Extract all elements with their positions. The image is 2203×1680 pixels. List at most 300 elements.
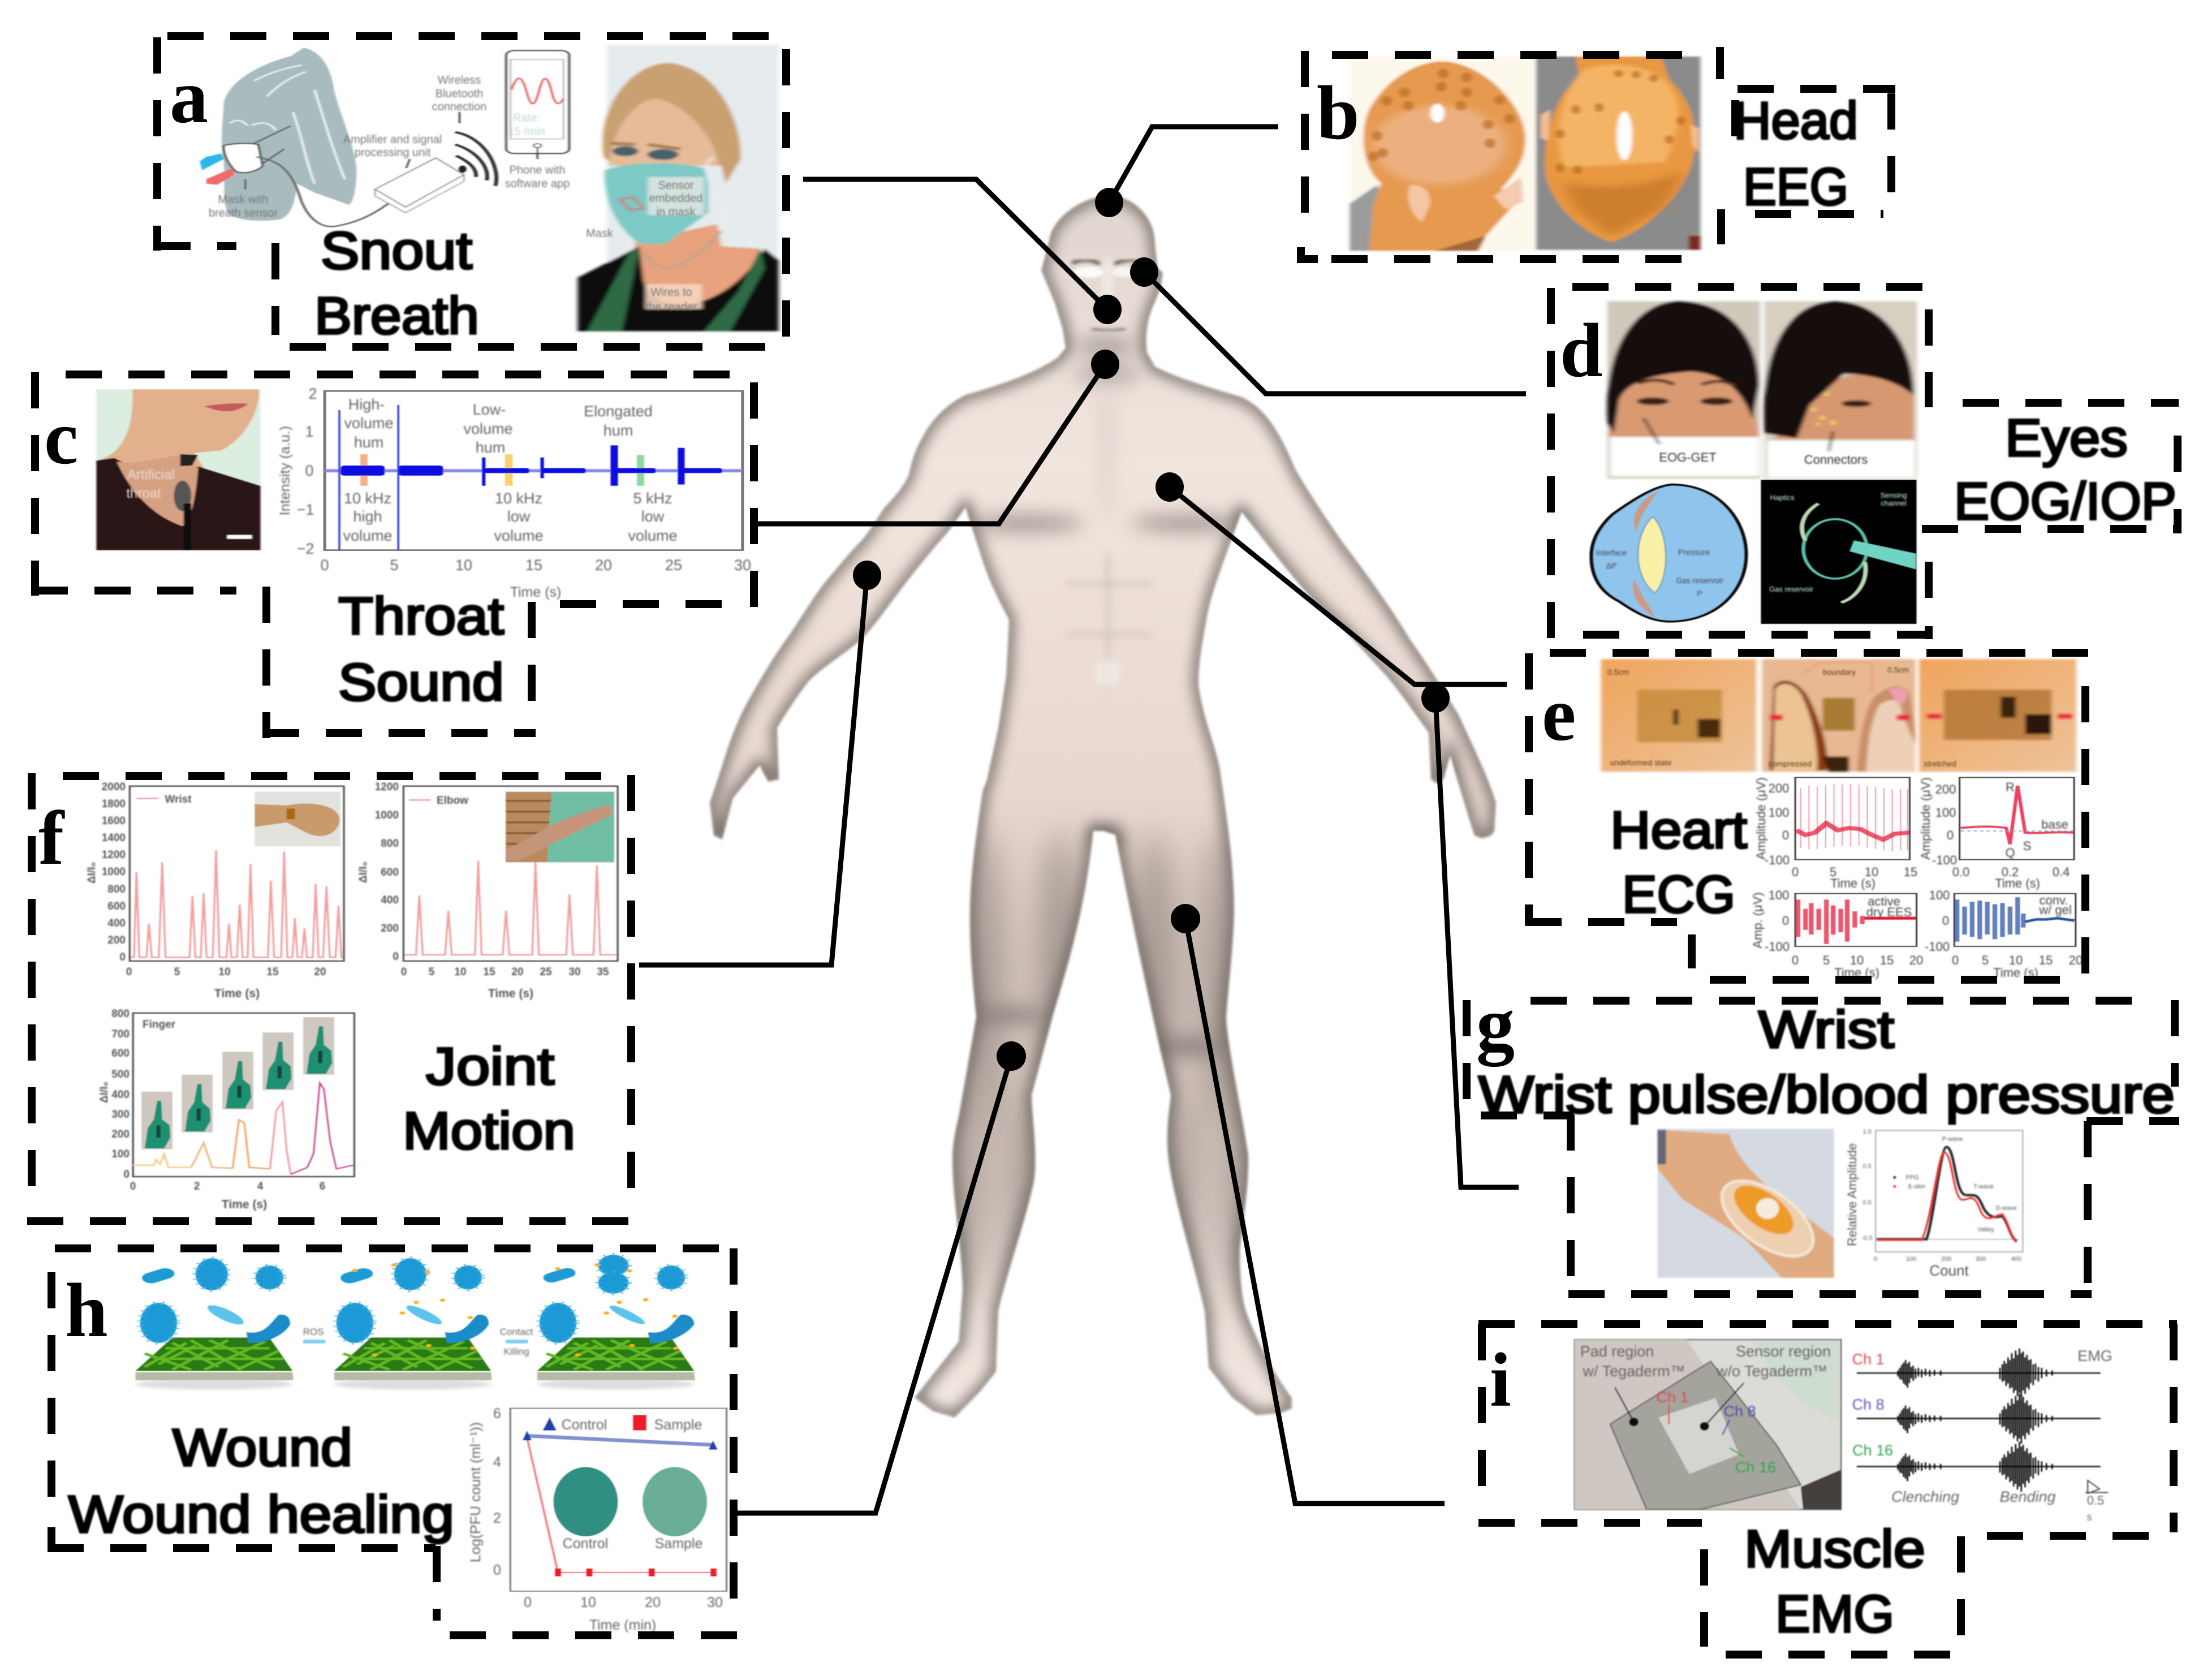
panel e small annotations: 5 xyxy=(1982,953,1989,967)
panel e small annotations: 0 xyxy=(1942,914,1949,928)
panel e small annotations: boundary xyxy=(1823,667,1856,677)
pulse chart labels: Count xyxy=(1929,1262,1969,1279)
panel f axis labels: 15 xyxy=(483,966,495,978)
panel e small annotations: 0 xyxy=(1782,914,1789,928)
panel d small annotations: Sensing xyxy=(1881,491,1907,499)
panel f axis labels: 400 xyxy=(111,1089,130,1101)
panel h small labels: 10 xyxy=(580,1595,596,1610)
panel c chart annotations: volume xyxy=(628,527,678,544)
panel c chart annotations: Time (s) xyxy=(510,584,561,600)
panel h small labels: Sample xyxy=(655,1536,702,1552)
panel e small annotations: 100 xyxy=(1769,888,1789,902)
panel c neck photo xyxy=(96,389,260,550)
panel f axis labels: 0 xyxy=(119,951,126,963)
panel i small labels: Pad region xyxy=(1580,1343,1654,1360)
panel a small annotations: Rate: xyxy=(513,112,540,124)
panel f axis labels: 4 xyxy=(257,1181,264,1192)
panel c chart annotations: 0 xyxy=(320,557,329,574)
pulse chart labels: 0.5 xyxy=(1863,1163,1872,1170)
panel c chart annotations: 1 xyxy=(305,423,314,440)
panel d small annotations: ΔP xyxy=(1606,561,1616,570)
panel c photo label xyxy=(126,467,175,501)
panel d small annotations: Gas reservoir xyxy=(1676,576,1723,585)
muscle caption box: EMG xyxy=(1775,1584,1894,1643)
panel f axis labels: 6 xyxy=(320,1181,325,1192)
panel c chart annotations: High- xyxy=(348,396,385,413)
panel e small annotations: stretched xyxy=(1924,759,1956,768)
panel f axis labels: 5 xyxy=(429,966,435,978)
panel a heading: Snout xyxy=(321,221,472,280)
panel e small annotations: Amp. (μV) xyxy=(1751,892,1765,949)
pulse chart labels: 100 xyxy=(1906,1256,1916,1263)
panel e small annotations: Q xyxy=(2005,846,2015,860)
panel i small labels: w/o Tegaderm™ xyxy=(1716,1363,1827,1380)
panel e small annotations: 15 xyxy=(1880,953,1894,967)
panel a small annotations: 15 /min xyxy=(508,126,545,138)
panel e small annotations: 0 xyxy=(1792,865,1799,879)
panel c chart annotations: volume xyxy=(344,415,394,432)
throat sound caption box xyxy=(263,587,536,738)
panel a small annotations: Sensor xyxy=(658,179,694,192)
panel f: joint motion xyxy=(27,773,635,1221)
panel e small annotations: 0.2 xyxy=(2002,865,2019,879)
panel f axis labels: 700 xyxy=(111,1028,130,1040)
panel e small annotations: -100 xyxy=(1932,853,1957,867)
panel f axis labels: Time (s) xyxy=(214,987,260,1000)
panel f axis labels: 800 xyxy=(107,884,126,895)
panel f axis labels: 1200 xyxy=(375,781,399,793)
panel e small annotations: conv. xyxy=(2040,893,2068,907)
panel e heading xyxy=(1610,800,1747,924)
panel g heading: Wrist xyxy=(1758,1000,1894,1059)
panel i dashed border xyxy=(1478,1324,2177,1536)
panel e ECG charts xyxy=(1795,778,2076,946)
pulse chart labels: Valley xyxy=(1977,1226,1994,1233)
panel f axis labels: 1200 xyxy=(102,849,126,861)
panel h small labels xyxy=(303,1326,723,1633)
panel d small annotations: channel xyxy=(1881,499,1907,507)
panel f axis labels: Elbow xyxy=(437,795,468,807)
panel c chart annotations: low xyxy=(641,508,665,525)
panel c chart annotations: Intensity (a.u.) xyxy=(277,426,293,515)
panel h heading: Wound healing xyxy=(68,1485,454,1544)
panel d small annotations: Haptics xyxy=(1770,493,1795,502)
panel f axis labels: 600 xyxy=(381,867,399,878)
panel f axis labels: 0 xyxy=(126,966,132,978)
panel c chart annotations: 10 kHz xyxy=(344,490,391,507)
panel c chart annotations: volume xyxy=(343,527,393,544)
wrist strain chart xyxy=(130,786,344,961)
panel a small annotations: the reader xyxy=(645,301,697,313)
panel f axis labels: 15 xyxy=(266,966,279,978)
panel g heading xyxy=(1478,1000,2175,1124)
panel e small annotations: 5 xyxy=(1823,953,1830,967)
panel e small annotations: -100 xyxy=(1765,853,1790,867)
panel i small labels: w/ Tegaderm™ xyxy=(1582,1363,1685,1380)
panel e small annotations: 100 xyxy=(1935,805,1956,820)
panel a small annotations: software app xyxy=(505,178,570,190)
panel e heading: ECG xyxy=(1622,865,1735,924)
panel d small annotations: Connectors xyxy=(1804,453,1868,467)
panel c chart annotations: 10 kHz xyxy=(495,490,542,507)
panel h small labels: 6 xyxy=(493,1406,501,1421)
panel d small annotations xyxy=(1596,450,1907,598)
panel e small annotations: 0 xyxy=(1792,953,1799,967)
panel d small annotations: EOG-GET xyxy=(1659,450,1717,464)
panel c chart annotations: 5 kHz xyxy=(633,490,672,507)
panel f axis labels: Time (s) xyxy=(222,1198,267,1211)
panel d face photos xyxy=(1607,301,1917,479)
pulse chart labels: 1.0 xyxy=(1863,1128,1872,1135)
facial features xyxy=(1072,256,1145,331)
panel f axis labels: 100 xyxy=(111,1148,130,1160)
panel e small annotations: 0.5cm xyxy=(1607,667,1629,677)
panel e small annotations: Time (s) xyxy=(1993,966,2038,980)
panel f axis labels: 1000 xyxy=(102,866,126,878)
panel f axis labels: 10 xyxy=(454,966,467,978)
panel f axis labels: ΔI/I₀ xyxy=(86,862,98,884)
panel e dashed border xyxy=(1525,653,2090,980)
panel a small annotations: Wires to xyxy=(650,286,692,299)
panel f axis labels: 0 xyxy=(130,1181,136,1192)
panel h small labels: 0 xyxy=(524,1595,532,1610)
EMG traces xyxy=(1857,1349,2108,1493)
panel h heading: Wound xyxy=(173,1418,352,1477)
pulse chart labels xyxy=(1845,1128,2021,1279)
panel h small labels: 0 xyxy=(493,1562,501,1578)
panel e small annotations: 15 xyxy=(2039,953,2053,967)
panel i small labels: Ch 1 xyxy=(1656,1389,1689,1406)
panel h small labels: Sample xyxy=(654,1417,702,1433)
panel h small labels: Control xyxy=(562,1417,607,1433)
human body figure xyxy=(710,196,1496,1418)
panel i small labels: 0.5 xyxy=(2087,1493,2104,1507)
panel f axis labels: Time (s) xyxy=(488,987,533,1000)
panel e small annotations: 10 xyxy=(1865,865,1878,879)
panel c chart annotations: low xyxy=(507,508,531,525)
panel c chart annotations: volume xyxy=(463,420,513,437)
panel f axis labels: 25 xyxy=(540,966,552,978)
panel h small labels: Contact xyxy=(500,1326,533,1337)
panel e small annotations xyxy=(1607,665,2083,980)
panel f axis labels: 20 xyxy=(314,966,326,978)
panel e small annotations: 20 xyxy=(2069,953,2083,967)
panel e small annotations: 0.0 xyxy=(1952,865,1969,879)
panel e small annotations: 0.4 xyxy=(2053,865,2070,879)
panel e small annotations: Amplitude (μV) xyxy=(1919,777,1933,860)
panel e small annotations: 100 xyxy=(1769,805,1789,820)
panel i small labels: s xyxy=(2087,1511,2092,1523)
panel e small annotations: 15 xyxy=(1904,865,1917,879)
panel f axis labels: 800 xyxy=(111,1008,130,1020)
panel f axis labels: 5 xyxy=(174,966,180,978)
panel e small annotations: S xyxy=(2023,839,2031,853)
panel f axis labels: 400 xyxy=(381,894,399,906)
panel e label: e xyxy=(1542,672,1576,757)
panel f axis labels: 30 xyxy=(568,966,581,978)
panel f axis labels: 200 xyxy=(381,923,399,934)
panel f axis labels: 0 xyxy=(401,966,407,978)
panel c chart annotations: −1 xyxy=(297,501,314,518)
panel f axis labels: 800 xyxy=(381,838,399,850)
panel i small labels: Ch 16 xyxy=(1735,1459,1776,1476)
panel g heading: Wrist pulse/blood pressure xyxy=(1478,1065,2175,1124)
panel d small annotations: Pressure xyxy=(1678,548,1710,557)
panel c dashed border xyxy=(32,372,754,608)
panel c chart annotations: 15 xyxy=(525,557,542,574)
eyes caption box: Eyes xyxy=(2005,408,2128,467)
pulse chart labels: -0.5 xyxy=(1862,1235,1872,1242)
panel c label: c xyxy=(44,395,78,480)
panel e small annotations: active xyxy=(1868,894,1900,908)
panel e small annotations: dry EES xyxy=(1866,905,1912,919)
panel a small annotations: Phone with xyxy=(510,164,565,176)
panel h small labels: 30 xyxy=(707,1595,723,1610)
panel a photo: woman wearing mask xyxy=(577,45,779,331)
panel a: snout / breath xyxy=(154,36,786,347)
panel c chart annotations: 2 xyxy=(308,385,317,402)
throat sound caption box: Throat xyxy=(338,587,504,645)
pulse waveform chart xyxy=(1876,1131,2023,1252)
panel g dashed border xyxy=(1467,1000,2179,1294)
panel h small labels: 4 xyxy=(493,1454,501,1470)
panel a small annotations: connection xyxy=(432,101,486,113)
antibacterial mesh schematic xyxy=(136,1255,695,1390)
panel d small annotations: Interface xyxy=(1596,548,1627,557)
pulse chart labels: E-skin xyxy=(1908,1183,1925,1190)
head EEG caption box: EEG xyxy=(1743,157,1848,216)
panel h dashed border xyxy=(48,1248,738,1635)
connector lines from body points to panels xyxy=(639,127,1526,1513)
panel a small annotations: Amplifier and signal xyxy=(343,133,442,146)
panel a mask diagram xyxy=(200,48,569,227)
panel b label: b xyxy=(1317,71,1360,156)
panel e small annotations: undeformed state xyxy=(1610,758,1672,767)
panel d dashed border xyxy=(1551,287,1929,639)
panel e small annotations: w/ gel xyxy=(2038,903,2072,917)
panel e skin patch photos xyxy=(1601,659,2076,772)
panel i small labels xyxy=(1580,1343,2113,1523)
panel f heading: Motion xyxy=(403,1101,575,1160)
panel e small annotations: Time (s) xyxy=(1834,966,1879,980)
panel f axis labels: 0 xyxy=(123,1169,130,1181)
panel e small annotations: -100 xyxy=(1925,940,1950,954)
panel f heading xyxy=(403,1037,575,1160)
panel f axis labels: 2000 xyxy=(102,781,126,793)
panel f axis labels: 1000 xyxy=(375,809,399,821)
panel c chart annotations: 30 xyxy=(734,557,751,574)
muscle caption box xyxy=(1704,1519,1961,1655)
panel c chart annotations: 10 xyxy=(455,557,472,574)
panel c chart annotations: 25 xyxy=(665,557,682,574)
panel d label: d xyxy=(1560,308,1603,393)
panel c chart annotations: Low- xyxy=(473,401,506,418)
panel c waveform chart xyxy=(325,391,743,550)
panel d small annotations: Gas reservoir xyxy=(1769,585,1814,593)
panel c chart annotations: 0 xyxy=(305,462,314,479)
panel h small labels: Killing xyxy=(503,1346,529,1357)
finger strain chart xyxy=(133,1013,354,1177)
panel h heading xyxy=(68,1418,454,1544)
panel h: wound healing xyxy=(48,1248,738,1635)
panel i small labels: Bending xyxy=(1999,1488,2056,1505)
panel f axis labels: 500 xyxy=(111,1069,130,1080)
panel e small annotations: 5 xyxy=(1830,865,1836,879)
panel e small annotations: 0 xyxy=(1952,953,1959,967)
panel f axis labels: 1400 xyxy=(102,832,126,844)
panel c: throat / sound xyxy=(32,372,754,738)
panel f label: f xyxy=(38,796,65,881)
panel a small annotations: in mask xyxy=(657,206,696,218)
panel f axis labels: 200 xyxy=(107,934,126,946)
forearm sensor photo xyxy=(1575,1339,1841,1509)
panel e small annotations: 200 xyxy=(1935,782,1956,796)
panel c chart annotations: 20 xyxy=(595,557,612,574)
panel h small labels: 20 xyxy=(645,1595,661,1610)
panel c chart annotations: volume xyxy=(494,527,544,544)
panel a label: a xyxy=(170,54,208,139)
pulse chart labels: PPG xyxy=(1905,1174,1919,1181)
panel f axis labels: 10 xyxy=(218,966,231,978)
pulse chart labels: 400 xyxy=(2011,1256,2021,1263)
panel c chart annotations: hum xyxy=(476,439,505,456)
panel d lens photo xyxy=(1761,480,1916,624)
panel h small labels: Control xyxy=(563,1536,608,1552)
panel f axis labels: 20 xyxy=(511,966,524,978)
panel e small annotations: 0 xyxy=(1947,828,1954,842)
panel f axis labels: ΔI/I₀ xyxy=(98,1082,110,1103)
panel f axis labels xyxy=(86,781,609,1211)
panel a small annotations: Mask with xyxy=(218,193,268,206)
panel f heading: Joint xyxy=(426,1037,554,1096)
panel a small annotations: Bluetooth xyxy=(436,88,483,100)
panel f axis labels: Finger xyxy=(143,1019,176,1031)
panel c photo label: Artificial xyxy=(127,467,175,483)
pulse chart labels: 200 xyxy=(1941,1256,1951,1263)
panel c chart annotations: 5 xyxy=(390,557,399,574)
wrist photo xyxy=(1658,1129,1834,1278)
panel f dashed border xyxy=(27,773,635,1221)
panel e small annotations: 0 xyxy=(1782,828,1789,842)
panel e small annotations: 20 xyxy=(1909,953,1923,967)
panel c chart annotations: hum xyxy=(354,434,383,451)
panel b: head EEG xyxy=(1301,47,1895,259)
panel a small annotations: Mask xyxy=(586,227,614,240)
panel c chart annotations: Elongated xyxy=(584,403,653,420)
panel i label: i xyxy=(1490,1338,1511,1423)
pulse chart labels: T-wave xyxy=(1973,1183,1994,1190)
panel c photo label: throat xyxy=(126,486,161,501)
panel c chart annotations: hum xyxy=(603,422,633,439)
elbow strain chart xyxy=(404,786,618,961)
panel f axis labels: 600 xyxy=(111,1048,130,1059)
panel b scalp photos xyxy=(1350,57,1700,251)
panel d eye diagram xyxy=(1592,485,1746,622)
pulse chart labels: D-wave xyxy=(1995,1205,2017,1212)
panel e: heart ECG xyxy=(1525,653,2090,980)
panel h label: h xyxy=(65,1268,108,1353)
panel e small annotations: 100 xyxy=(1929,888,1950,902)
panel c chart annotations: high xyxy=(353,508,382,525)
panel g label: g xyxy=(1476,982,1515,1067)
panel e heading: Heart xyxy=(1610,800,1747,859)
panel f axis labels: 600 xyxy=(107,901,126,912)
pulse chart labels: P-wave xyxy=(1942,1136,1963,1143)
panel e small annotations: Amplitude (μV) xyxy=(1754,777,1768,860)
panel i small labels: Sensor region xyxy=(1736,1343,1831,1360)
panel h small labels: 2 xyxy=(493,1510,501,1526)
panel a heading xyxy=(314,221,479,345)
panel e small annotations: base xyxy=(2041,817,2068,832)
panel f axis labels: 400 xyxy=(107,917,126,929)
panel f axis labels: Wrist xyxy=(165,794,192,805)
pulse chart labels: 0 xyxy=(1874,1256,1877,1263)
panel d small annotations: P xyxy=(1697,589,1702,598)
panel f axis labels: 200 xyxy=(111,1128,130,1140)
panel e small annotations: Time (s) xyxy=(1830,876,1876,890)
panel i small labels: Clenching xyxy=(1891,1488,1959,1505)
panel f axis labels: 35 xyxy=(597,966,609,978)
panel h small labels: Time (min) xyxy=(589,1617,656,1633)
panel e small annotations: 0.5cm xyxy=(1887,665,1909,674)
panel d: eyes EOG/IOP xyxy=(1551,287,2179,639)
muscle caption box: Muscle xyxy=(1744,1519,1925,1578)
pulse chart labels: 0.0 xyxy=(1863,1199,1872,1206)
panel b dashed border xyxy=(1301,47,1721,259)
panel i small labels: Ch 1 xyxy=(1852,1351,1885,1368)
panel e small annotations: 10 xyxy=(2009,953,2023,967)
panel e small annotations: 10 xyxy=(1850,953,1864,967)
panel a heading: Breath xyxy=(314,286,479,345)
panel a small annotations: Wireless xyxy=(438,74,481,87)
eyes caption box: EOG/IOP xyxy=(1954,472,2176,531)
panel e small annotations: -100 xyxy=(1765,940,1790,954)
eyes caption box xyxy=(1922,403,2179,533)
head EEG caption box xyxy=(1734,89,1895,219)
head EEG caption box: Head xyxy=(1734,91,1858,150)
throat sound caption box: Sound xyxy=(338,653,504,712)
panel h small labels: ROS xyxy=(303,1326,324,1337)
panel g: wrist pulse xyxy=(1467,982,2179,1294)
panel a small annotations: processing unit xyxy=(355,147,431,159)
log PFU chart xyxy=(510,1408,726,1591)
panel i: muscle EMG xyxy=(1478,1324,2177,1655)
panel i small labels: Ch 8 xyxy=(1852,1396,1885,1413)
panel c chart annotations xyxy=(277,385,751,600)
panel f axis labels: 1600 xyxy=(102,815,126,827)
panel i small labels: Ch 16 xyxy=(1852,1442,1893,1459)
panel i small labels: Ch 8 xyxy=(1723,1403,1756,1420)
panel f axis labels: 0 xyxy=(393,951,399,963)
pulse chart labels: 300 xyxy=(1976,1256,1986,1263)
body location markers xyxy=(853,188,1450,1071)
panel f axis labels: 300 xyxy=(111,1109,130,1121)
panel h small labels: Log(PFU count (ml⁻¹)) xyxy=(468,1422,484,1562)
panel a small annotations: embedded xyxy=(649,192,702,205)
panel e small annotations: Time (s) xyxy=(1995,876,2040,890)
panel a dashed border xyxy=(154,36,786,347)
panel e small annotations: 200 xyxy=(1769,781,1789,795)
panel f axis labels: 2 xyxy=(194,1181,200,1192)
panel f axis labels: 1800 xyxy=(102,798,126,810)
pulse chart labels: Relative Amplitude xyxy=(1845,1143,1859,1246)
panel i small labels: EMG xyxy=(2077,1347,2113,1364)
panel e small annotations: compressed xyxy=(1769,759,1812,768)
panel f axis labels: ΔI/I₀ xyxy=(357,861,369,883)
panel a small annotations xyxy=(209,74,702,313)
panel c chart annotations: −2 xyxy=(297,540,314,557)
panel a small annotations: breath sensor xyxy=(209,207,278,219)
